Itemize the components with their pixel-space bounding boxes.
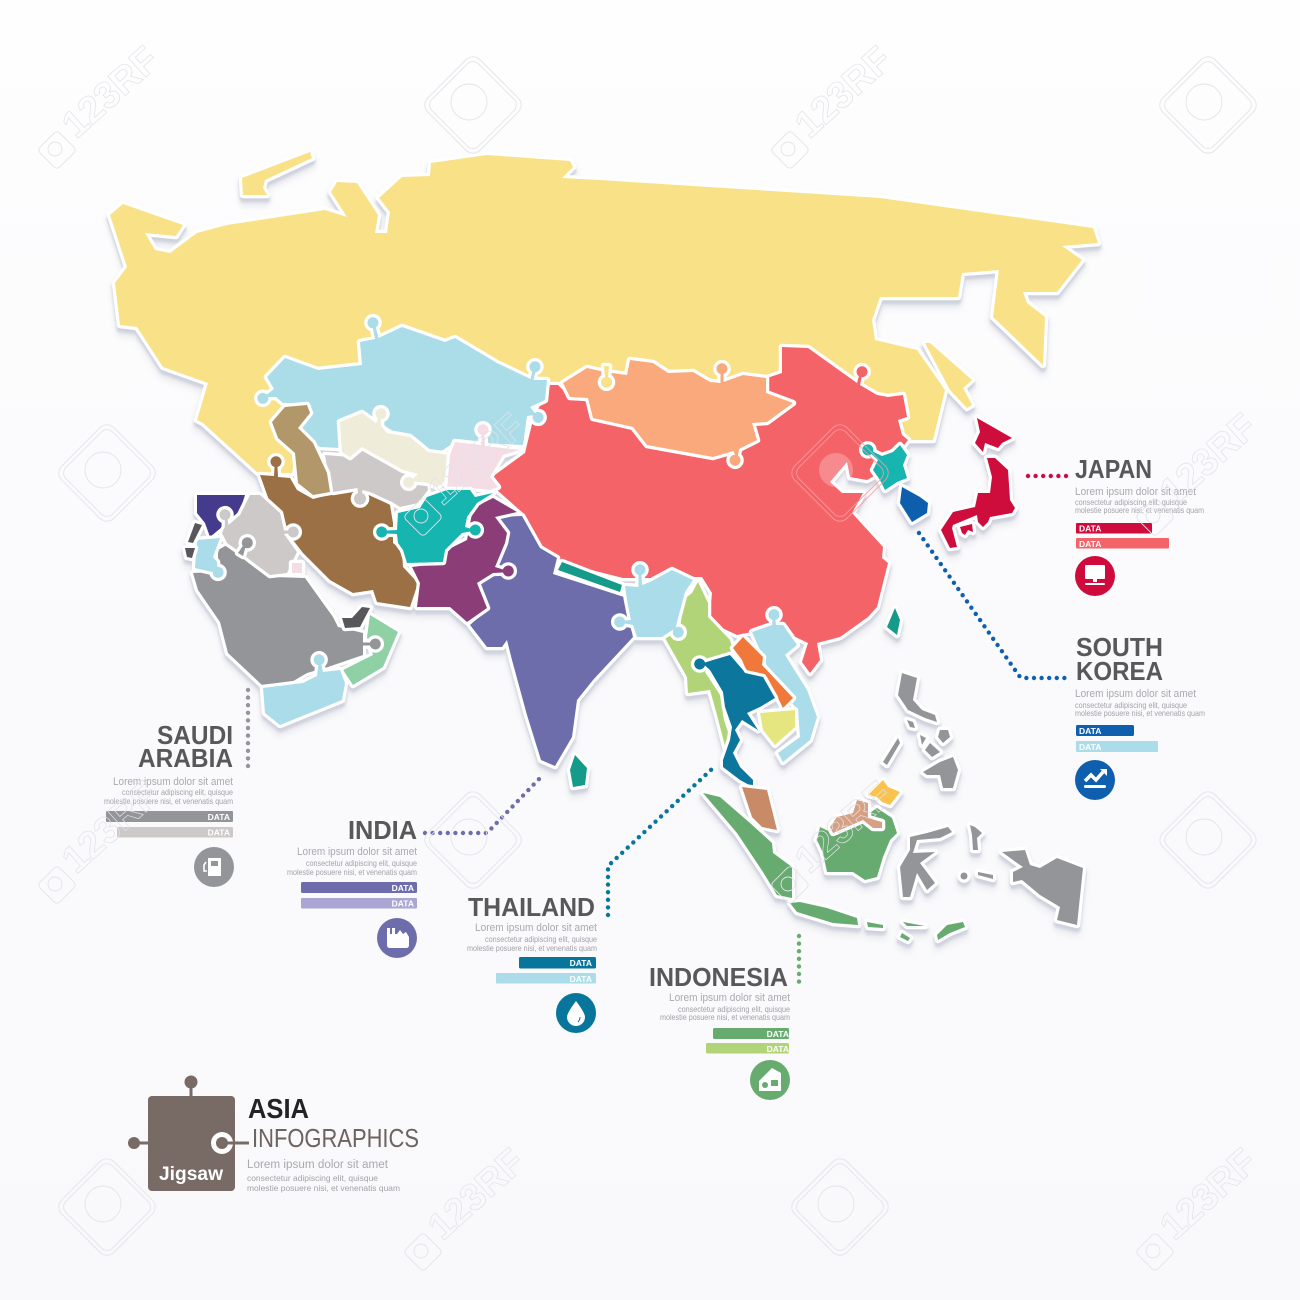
panel: Japan: molestie posuere nisi, et venenatis quam [1075, 506, 1204, 515]
icon: fuel pump [194, 847, 234, 887]
panel: Thailand: molestie posuere nisi, et venenatis quam [467, 944, 597, 953]
bar: Thailand data 2: DATA [570, 974, 592, 984]
logo: jigsaw piece [128, 1076, 249, 1191]
island: Philippines small 2 [938, 730, 950, 743]
islands: Philippines [898, 673, 937, 722]
panel: India [287, 815, 417, 958]
island: Bali [867, 922, 883, 928]
text: Saudi Arabia lorem: Lorem ipsum dolor sit amet [113, 776, 233, 788]
title: Asia Infographics: ASIA [248, 1093, 309, 1124]
bar: Saudi data 1: DATA [208, 812, 230, 822]
country: Iraq [220, 495, 299, 575]
panel: Indonesia: molestie posuere nisi, et venenatis quam [660, 1013, 790, 1022]
country: Pakistan [412, 498, 517, 622]
dotted line: Thailand [608, 768, 713, 915]
island: Palawan [883, 738, 900, 765]
country: UAE [342, 607, 370, 628]
heading: South Korea: KOREA [1076, 656, 1163, 686]
text: title lorem: consectetur adipiscing elit, quisque [247, 1174, 379, 1183]
bar: India data 2: DATA [392, 898, 414, 908]
heading: Saudi Arabia: ARABIA [138, 743, 233, 773]
country: North Korea [862, 444, 907, 490]
country: Kuwait [292, 563, 302, 573]
country: Kazakhstan [257, 317, 547, 452]
country: Mongolia [563, 360, 793, 466]
dotted line: Indonesia [797, 936, 801, 986]
island: Novaya Zemlya [242, 152, 312, 195]
label: Jigsaw: Jigsaw [159, 1164, 223, 1185]
island: Timor [937, 922, 965, 940]
text: title lorem: molestie posuere nisi, et venenatis quam [247, 1184, 400, 1193]
map of Asia [110, 152, 1098, 941]
text: Thailand lorem: Lorem ipsum dolor sit amet [475, 922, 597, 934]
country: China [492, 347, 908, 673]
country: Oman [343, 615, 398, 685]
dotted line: South Korea [919, 533, 1068, 678]
panel: India: molestie posuere nisi, et venenatis quam [287, 868, 417, 877]
panel: Saudi Arabia: consectetur adipiscing elit, quisque [122, 788, 233, 797]
country: Java [790, 902, 858, 925]
bar: Thailand data 2 [496, 973, 596, 984]
island: Papua [1002, 850, 1083, 925]
island: Sri Lanka [570, 755, 587, 787]
island: Sumba [900, 933, 910, 941]
country: Russia [110, 155, 1098, 473]
heading: South Korea: SOUTH [1076, 632, 1163, 662]
title: Asia Infographics [248, 1093, 419, 1153]
region: East Malaysia [830, 800, 882, 833]
bar: Thailand data 1 [519, 957, 596, 968]
bar: Indonesia data 1: DATA [767, 1029, 789, 1039]
icon: house [750, 1060, 790, 1100]
heading: India: INDIA [348, 815, 417, 845]
text: India lorem: Lorem ipsum dolor sit amet [297, 846, 417, 858]
bar: Japan data 1: DATA [1079, 524, 1101, 534]
panel: South Korea: molestie posuere nisi, et venenatis quam [1075, 709, 1205, 718]
bar: Saudi data 2: DATA [208, 828, 230, 838]
country: Cambodia [760, 710, 795, 745]
bar: India data 2 [301, 898, 417, 908]
bar: Indonesia data 1 [713, 1028, 789, 1039]
text: title lorem: Lorem ipsum dolor sit amet [247, 1159, 389, 1171]
bar: South Korea data 2 [1076, 741, 1158, 752]
knob: left [128, 1137, 149, 1149]
text: South Korea lorem: Lorem ipsum dolor sit amet [1075, 688, 1196, 700]
country: Turkmenistan [325, 447, 428, 507]
panel: Indonesia: consectetur adipiscing elit, quisque [678, 1005, 790, 1014]
island: small dot [960, 872, 968, 880]
heading: Saudi Arabia [138, 720, 233, 773]
country: Saudi Arabia [193, 537, 381, 685]
bar: India data 1 [301, 882, 417, 893]
island: Shikoku [960, 524, 973, 535]
country: Kyrgyzstan [447, 424, 520, 490]
island: Mindanao [923, 757, 958, 788]
heading: Saudi Arabia: SAUDI [157, 720, 233, 750]
title: Asia Infographics: INFOGRAPHICS [252, 1123, 419, 1153]
panel: Thailand: consectetur adipiscing elit, quisque [485, 935, 597, 944]
country: Sumatra [703, 793, 792, 898]
country: Saudi knob over Iraq [238, 537, 253, 556]
country: Thailand [694, 655, 775, 787]
icon: factory [377, 918, 417, 958]
panel: South Korea: consectetur adipiscing elit, quisque [1075, 701, 1187, 710]
island: Hokkaido [975, 418, 1012, 452]
panel: Saudi Arabia [104, 720, 234, 887]
heading: Indonesia: INDONESIA [649, 962, 788, 992]
country: South Korea [900, 487, 928, 522]
bar: Saudi data 1 [106, 811, 233, 822]
country: India [470, 516, 633, 766]
country: Caspian region tan [272, 405, 330, 495]
watermarks: 123RF [1152, 1141, 1265, 1248]
bar: South Korea data 1: DATA [1079, 726, 1101, 736]
watermarks: 123RF [420, 406, 533, 513]
watermarks: 123RF [1152, 406, 1265, 513]
country: Laos [733, 637, 793, 708]
island: Philippines small 4 [925, 743, 940, 757]
bar: Japan data 2 [1076, 538, 1169, 549]
dotted line: Japan [1028, 474, 1068, 478]
icon: computer [1075, 556, 1115, 596]
panel: Japan: consectetur adipiscing elit, quisque [1075, 498, 1187, 507]
text: Indonesia lorem: Lorem ipsum dolor sit amet [669, 992, 790, 1004]
region: Brunei [868, 780, 900, 805]
country: Syria [197, 495, 245, 537]
island: Taiwan [887, 608, 900, 635]
dotted line: Saudi Arabia [246, 690, 250, 766]
country: Jordan [195, 538, 224, 578]
bar: Saudi data 2 [117, 827, 233, 838]
panel: Indonesia [649, 962, 790, 1100]
bar: Thailand data 1: DATA [570, 958, 592, 968]
watermarks: 123RF [787, 774, 900, 881]
country: Yemen [263, 654, 345, 725]
island: Philippines small 3 [920, 735, 926, 745]
panel: Thailand [467, 892, 597, 1033]
country: Afghanistan [376, 490, 493, 563]
country: Iran [260, 456, 418, 607]
country: Israel [185, 548, 195, 558]
text: title lorem [247, 1159, 400, 1193]
island: Sakhalin [925, 343, 972, 408]
bar: Indonesia data 2: DATA [767, 1044, 789, 1054]
panel: Saudi Arabia: molestie posuere nisi, et venenatis quam [104, 797, 233, 806]
panel: Japan [1075, 454, 1204, 596]
watermarks: 123RF [54, 774, 167, 881]
panel: India: consectetur adipiscing elit, quisque [306, 859, 417, 868]
bar: South Korea data 1 [1076, 725, 1134, 736]
country: Uzbekistan [340, 408, 450, 488]
bar: South Korea data 2: DATA [1079, 742, 1101, 752]
bar: Indonesia data 2 [706, 1043, 789, 1054]
watermarks: 123RF [420, 1141, 533, 1248]
country: Vietnam [752, 609, 817, 762]
island: Seram [978, 872, 993, 879]
island: Maluku [970, 825, 982, 850]
island: Borneo [817, 808, 897, 880]
text: Japan lorem: Lorem ipsum dolor sit amet [1075, 486, 1196, 498]
country: Malaysia peninsula [742, 787, 777, 830]
watermarks: 123RF [787, 39, 900, 146]
panel: South Korea [1075, 632, 1205, 800]
piece body [148, 1096, 235, 1191]
country: Myanmar [665, 582, 733, 750]
knob: top [184, 1076, 198, 1097]
bar: Japan data 1 [1076, 523, 1152, 534]
bar: Japan data 2: DATA [1079, 539, 1101, 549]
heading: South Korea [1076, 632, 1163, 686]
dotted line: India [425, 778, 540, 833]
island: Sulawesi [900, 827, 952, 897]
bar: India data 1: DATA [392, 883, 414, 893]
heading: Thailand: THAILAND [468, 892, 595, 922]
icon: chart [1075, 760, 1115, 800]
country: Lebanon [188, 523, 202, 543]
country: Nepal [558, 562, 622, 592]
icon: water drop [556, 993, 596, 1033]
watermarks: 123RF [54, 39, 167, 146]
heading: Japan: JAPAN [1075, 454, 1152, 484]
island: Lombok [903, 922, 925, 926]
island: Honshu [941, 458, 1015, 548]
socket ring [211, 1132, 249, 1154]
island: Philippines small 1 [907, 720, 915, 728]
knob: Russia into Mongolia [601, 366, 612, 388]
country: Bangladesh [614, 564, 693, 638]
